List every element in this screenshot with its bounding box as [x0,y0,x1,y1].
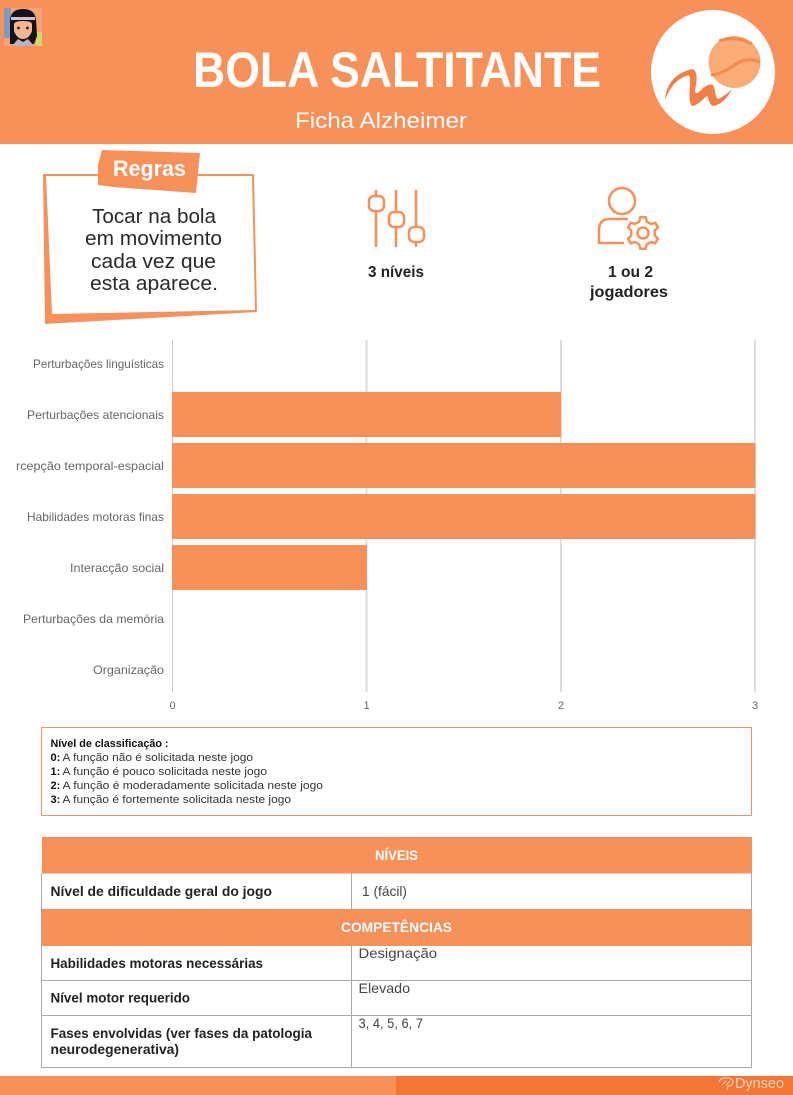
row: phases: 3, 4, 5, 6, 7 [358,1015,423,1031]
logo: bouncing ball [651,10,775,134]
legend: classification levels: 3: [50,794,60,806]
header: competências: COMPETÊNCIAS [341,918,452,935]
header background [0,0,793,144]
legend: classification levels: 2: [50,780,60,792]
rules text: em movimento [85,228,222,250]
rules text [85,206,222,295]
players label: jogadores [589,284,668,301]
bars [172,392,756,590]
row: motor level: Nível motor requerido [50,990,190,1006]
category labels: rcepção temporal-espacial [16,459,164,473]
row: phases [50,1015,423,1057]
icon: brain [719,1078,733,1090]
legend: classification levels [42,728,752,816]
category labels: Perturbações da memória [23,612,164,626]
axis labels: 0 [169,700,176,712]
row: difficulty [50,883,407,899]
players label: 1 ou 2 [608,264,653,281]
axis labels: 1 [363,700,370,712]
panel: rules [43,150,257,324]
footer bar [0,1075,793,1095]
legend: classification levels: A função não é solicitada neste jogo [62,752,253,764]
row: phases: Fases envolvidas (ver fases da patologia [50,1025,312,1041]
category labels: Perturbações linguísticas [33,357,164,371]
header: níveis [42,837,752,874]
legend: classification levels: 0: [50,752,60,764]
table grid [42,873,752,1068]
category labels: Organização [93,663,164,677]
panel: players [589,188,668,301]
header: competências [42,909,752,946]
axis labels: 3 [752,700,758,712]
avatar portrait [4,8,42,46]
brand name: Dynseo [735,1075,784,1092]
rules text: cada vez que [91,251,216,273]
category labels [16,357,164,677]
panel: levels [368,190,424,281]
row: motor level [50,980,410,1006]
row: motor skills [50,945,437,971]
row: difficulty: 1 (fácil) [362,883,407,899]
axis labels: 2 [558,700,564,712]
category labels: Interacção social [70,561,164,575]
icon: user with gear [599,188,658,249]
legend: classification levels: Nível de classificação : [50,738,168,750]
axis labels [169,700,758,712]
rules heading: Regras [113,156,186,181]
subtitle: Ficha Alzheimer [295,108,467,133]
icon: sliders [369,190,424,247]
legend: classification levels: A função é moderadamente solicitada neste jogo [62,780,323,792]
legend: classification levels: 1: [50,766,60,778]
row: motor skills: Habilidades motoras necessárias [50,955,263,971]
levels label: 3 níveis [368,264,424,281]
rules text: Tocar na bola [92,206,217,228]
header banner [0,0,793,144]
row: phases: neurodegenerativa) [50,1041,179,1057]
header: níveis: NÍVEIS [375,847,418,863]
row: motor skills: Designação [358,945,437,961]
table: levels and competencies [42,837,752,1068]
rules tag [98,150,200,193]
rules frame [43,174,257,324]
category labels: Habilidades motoras finas [27,510,164,524]
players label [589,264,668,301]
legend: classification levels: A função é fortemente solicitada neste jogo [62,794,291,806]
row: motor level: Elevado [358,980,410,996]
row: difficulty: Nível de dificuldade geral do jogo [50,883,272,899]
legend: classification levels: A função é pouco solicitada neste jogo [62,766,267,778]
category labels: Perturbações atencionais [27,408,164,422]
title: BOLA SALTITANTE [193,42,601,98]
rules text: esta aparece. [90,273,218,295]
bar chart [16,340,758,712]
